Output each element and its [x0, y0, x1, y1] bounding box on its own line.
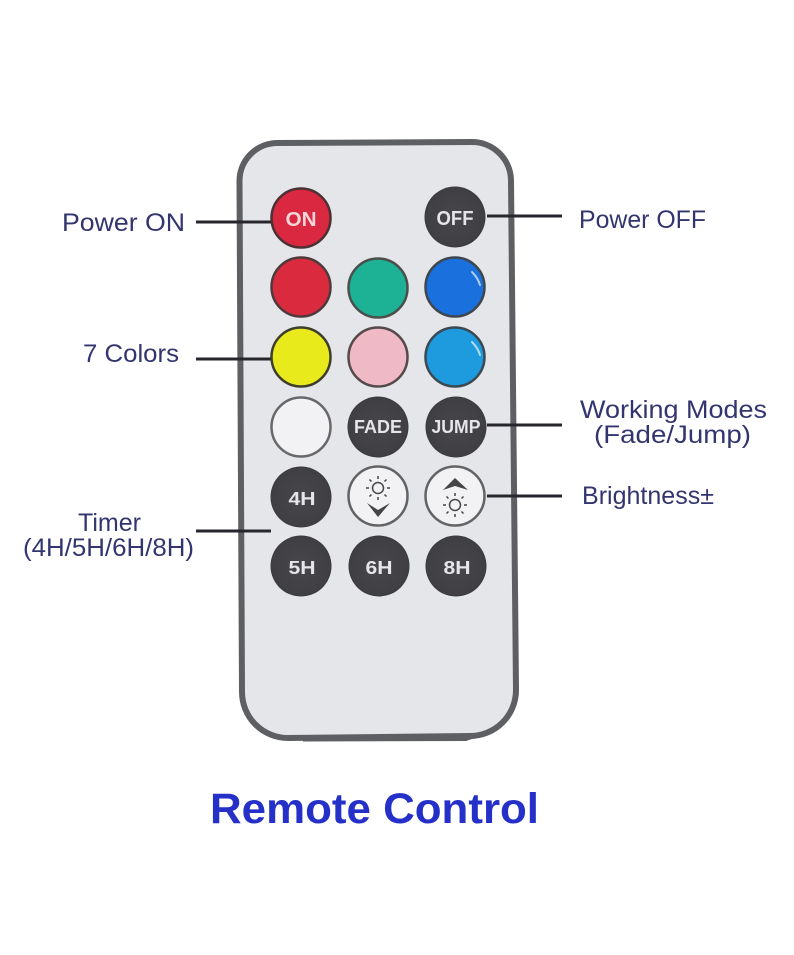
button: 6H: [348, 536, 410, 596]
leader line: Working Modes: [487, 424, 562, 426]
button: 5H: 5H: [288, 558, 316, 578]
label: Timer durations: (4H/5H/6H/8H): [23, 534, 194, 562]
button: red: [272, 258, 330, 316]
leader line: Power ON: [196, 220, 271, 224]
button: 4H: [270, 466, 332, 528]
label: Timer: Timer: [78, 509, 141, 537]
panel: remote control body: [240, 142, 516, 742]
leader line: Power OFF: [487, 214, 562, 218]
button: 8H: 8H: [444, 558, 470, 578]
button: 6H: 6H: [366, 558, 392, 578]
button: pink: [348, 328, 408, 386]
button: ON: ON: [286, 209, 316, 231]
button: green: [348, 258, 408, 318]
button: yellow: [272, 328, 330, 386]
button: light blue: [426, 328, 484, 386]
button: FADE: FADE: [354, 417, 402, 437]
button: FADE: [348, 396, 408, 458]
label: Working Modes: Working Modes: [580, 396, 767, 424]
button: 5H: [270, 536, 332, 596]
title: Remote Control: [210, 785, 539, 833]
button: blue: [426, 258, 484, 316]
button: brightness down: [348, 466, 408, 526]
button: brightness up: [426, 466, 484, 526]
button: white: [272, 398, 330, 456]
button: 8H: [426, 536, 486, 596]
button: OFF: [424, 186, 486, 248]
leader line: Timer: [196, 530, 271, 532]
label: Power ON: Power ON: [62, 209, 185, 237]
label: 7 Colors: 7 Colors: [83, 340, 179, 368]
label: Fade/Jump: (Fade/Jump): [594, 421, 751, 449]
label: Brightness: Brightness±: [582, 482, 714, 510]
label: Power OFF: Power OFF: [579, 206, 706, 234]
button: JUMP: [426, 396, 486, 458]
button: JUMP: JUMP: [432, 417, 480, 437]
leader line: Brightness: [487, 494, 562, 498]
button: 4H: 4H: [288, 489, 316, 509]
leader line: 7 Colors: [196, 358, 271, 360]
button: ON: [272, 188, 330, 248]
button: OFF: OFF: [436, 208, 474, 230]
